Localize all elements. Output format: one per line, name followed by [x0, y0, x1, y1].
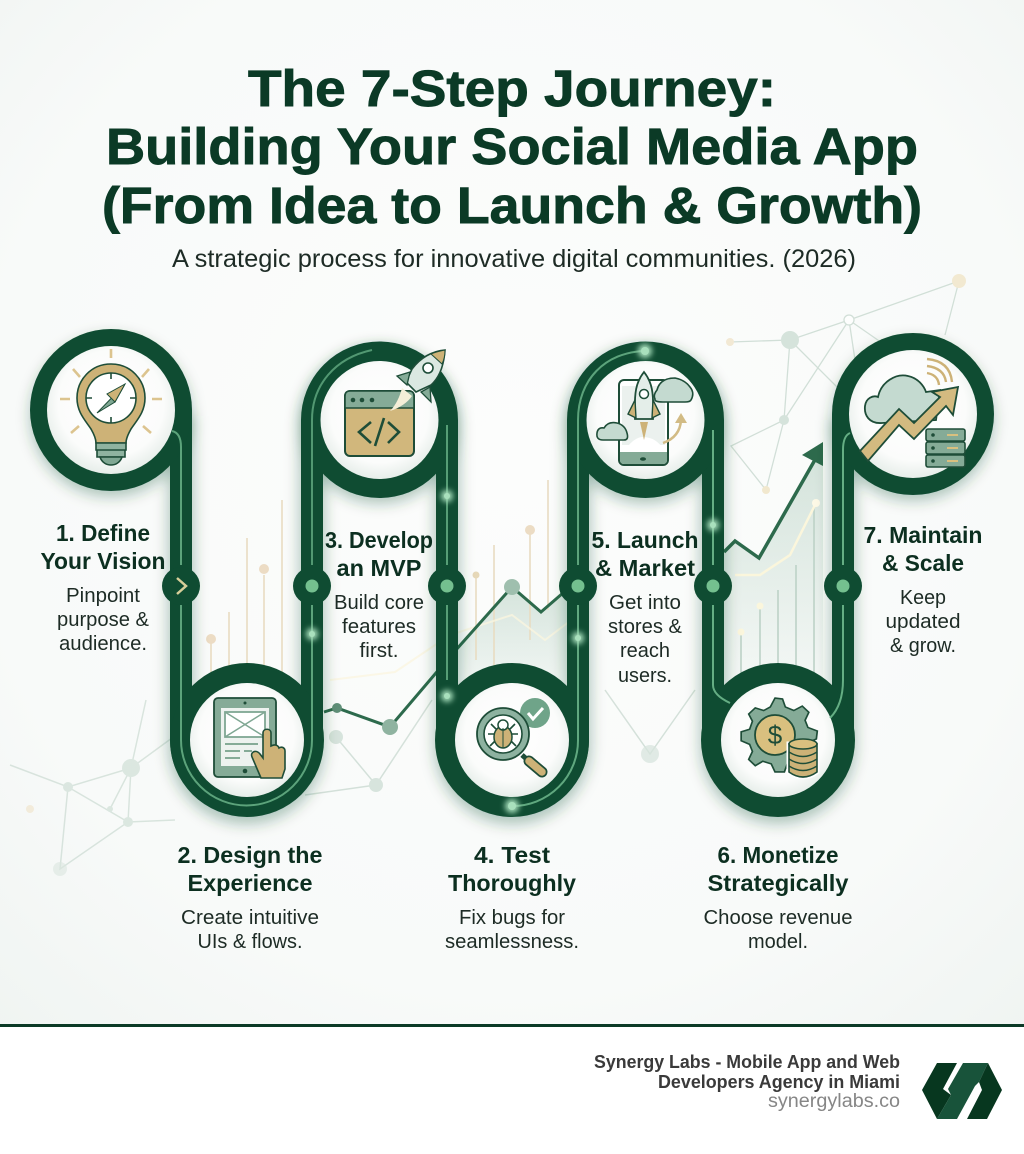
- step 3 text: [325, 527, 433, 662]
- step 3 text: 3. Develop: [325, 527, 433, 553]
- title: Building Your Social Media App: [106, 118, 918, 175]
- step 5 text: reach: [620, 640, 670, 662]
- footer text: synergylabs.co: [768, 1091, 900, 1112]
- footer text: Synergy Labs - Mobile App and Web: [594, 1052, 900, 1072]
- path highlights: [172, 350, 850, 806]
- connector node 1 with chevron: [162, 567, 200, 605]
- step 1 text: [40, 520, 166, 655]
- growth chart: left bars: [206, 500, 282, 680]
- step 5 text: [592, 527, 698, 687]
- icon: code window with rocket: [345, 350, 445, 456]
- step 7 text: Keep: [900, 587, 946, 609]
- step 1 text: Your Vision: [40, 548, 166, 574]
- step 1 text: Pinpoint: [66, 585, 140, 607]
- step 5 text: stores &: [608, 616, 683, 638]
- step 1 text: purpose &: [57, 609, 150, 631]
- step 4 text: Fix bugs for: [459, 907, 565, 929]
- step 5 text: Get into: [609, 592, 681, 614]
- icon: magnifier with bug and check: [477, 698, 550, 772]
- step 5 text: users.: [618, 665, 672, 687]
- title: The 7-Step Journey:: [248, 60, 776, 117]
- icon: phone launch with clouds: [597, 372, 693, 465]
- network pattern: top right: [726, 274, 966, 494]
- subtitle: A strategic process for innovative digital communities. (2026): [172, 245, 856, 273]
- growth chart: right with arrow: [724, 442, 823, 690]
- icon: tablet wireframe with hand: [214, 698, 285, 778]
- step 7 text: & grow.: [890, 635, 956, 657]
- step 4 text: 4. Test: [474, 842, 550, 868]
- step 1 text: audience.: [59, 633, 147, 655]
- step 3 text: an MVP: [336, 555, 422, 581]
- journey path shadow: [30, 335, 994, 812]
- step 4 text: [445, 842, 579, 953]
- step 6 text: [704, 842, 852, 953]
- step 7 text: updated: [886, 611, 960, 633]
- network pattern: bottom left: [10, 700, 175, 876]
- path glow dots: [306, 344, 719, 813]
- step 7 text: [864, 522, 982, 657]
- step 2 text: [178, 842, 322, 953]
- white icon discs: [47, 346, 977, 797]
- icon: gear with dollar coin and stack: $: [768, 720, 783, 750]
- journey path: [30, 329, 994, 817]
- step 6 text: Strategically: [708, 870, 849, 896]
- step 7 text: 7. Maintain: [864, 522, 982, 548]
- icon: gear with dollar coin and stack: [741, 698, 817, 777]
- network pattern: centre: [305, 690, 695, 795]
- step 3 text: features: [342, 616, 416, 638]
- step 1 text: 1. Define: [56, 520, 150, 546]
- step 2 text: UIs & flows.: [198, 931, 302, 953]
- step 4 text: seamlessness.: [445, 931, 579, 953]
- step 4 text: Thoroughly: [448, 870, 576, 896]
- title: [102, 60, 922, 234]
- step 2 text: Experience: [188, 870, 312, 896]
- step 7 text: & Scale: [882, 550, 964, 576]
- footer bar: [0, 1024, 1024, 1154]
- step 5 text: 5. Launch: [592, 527, 698, 553]
- connector nodes: [293, 567, 862, 605]
- step 6 text: model.: [748, 931, 808, 953]
- growth chart: middle: [324, 480, 578, 735]
- footer text: [594, 1052, 900, 1112]
- footer text: Developers Agency in Miami: [658, 1072, 900, 1092]
- step 2 text: 2. Design the: [178, 842, 322, 868]
- step 3 text: first.: [360, 640, 398, 662]
- footer logo: [922, 1063, 1002, 1119]
- step 5 text: & Market: [595, 555, 695, 581]
- icon: cloud with growth arrow and servers: [860, 359, 965, 467]
- step 6 text: Choose revenue: [704, 907, 852, 929]
- title: (From Idea to Launch & Growth): [102, 177, 922, 234]
- step 2 text: Create intuitive: [181, 907, 319, 929]
- icon: light bulb compass: [60, 349, 162, 465]
- step 6 text: 6. Monetize: [718, 842, 838, 868]
- step 3 text: Build core: [334, 592, 424, 614]
